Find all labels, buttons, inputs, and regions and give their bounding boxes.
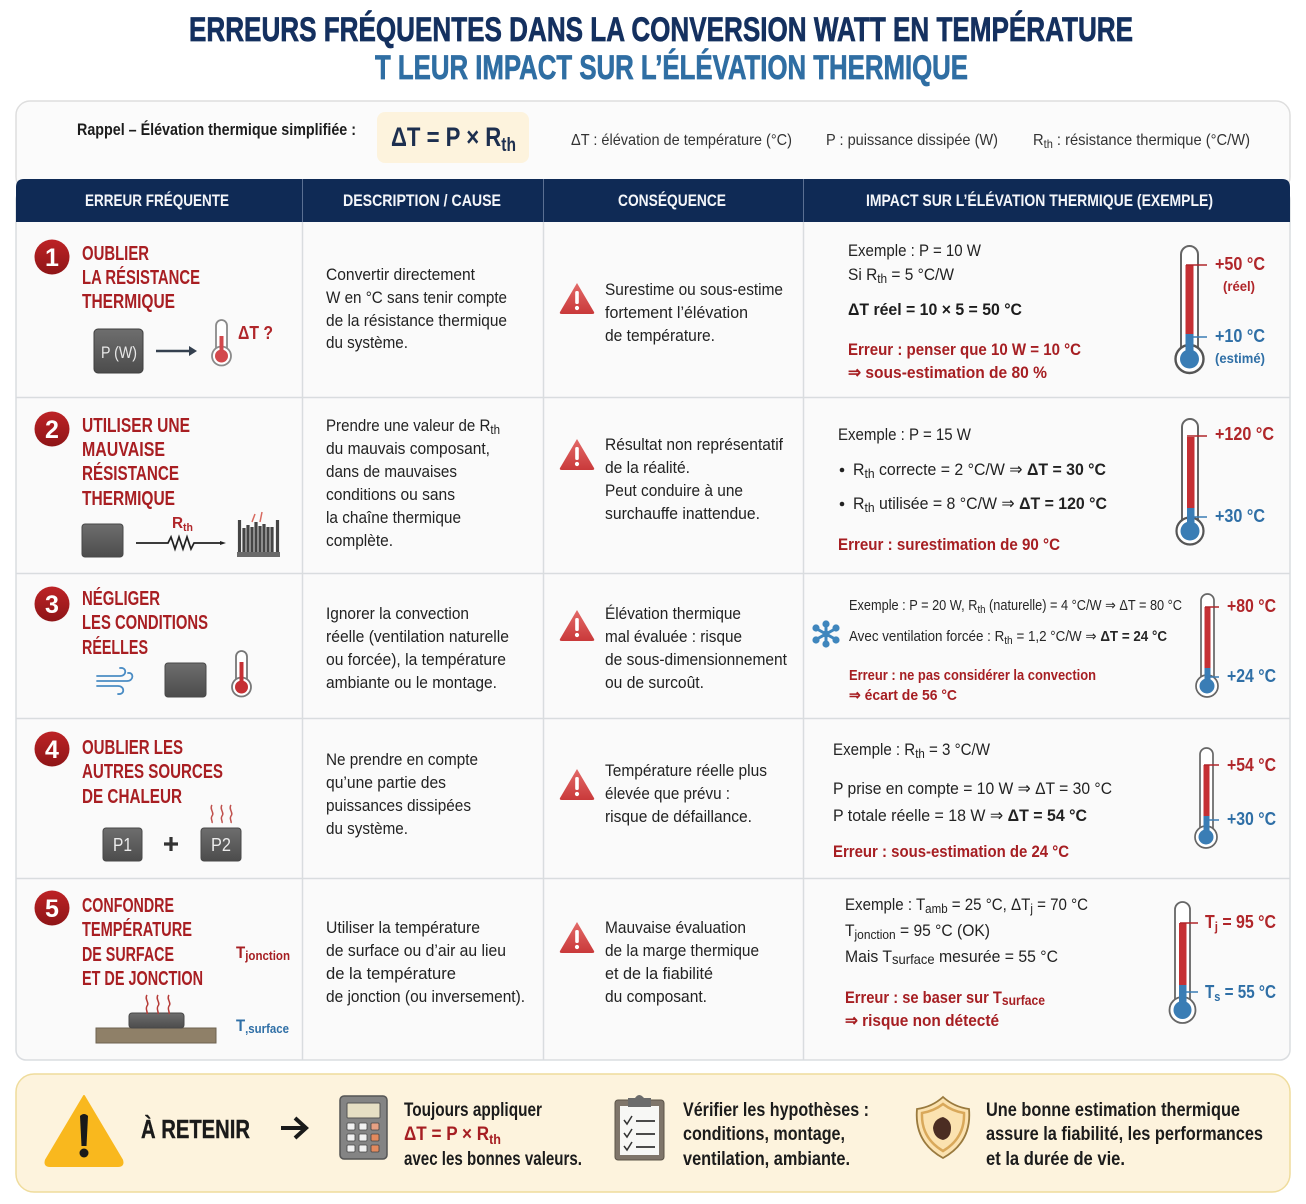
row 2 example: R <box>853 460 865 479</box>
panel: formula reminder: R <box>1033 132 1045 149</box>
row 4 consequence <box>605 761 767 826</box>
thermometer: row 1: +50 °C <box>1215 254 1265 274</box>
row 3 description <box>326 604 509 692</box>
row 2: wrong thermal resistance <box>34 412 1274 557</box>
thermometer: row 1: +10 °C <box>1215 326 1265 346</box>
row 2 description: complète. <box>326 531 393 550</box>
row 5 example: = 70 °C <box>1033 895 1088 914</box>
thermometer: row 1: (estimé) <box>1215 350 1265 366</box>
row 4 description <box>326 750 478 838</box>
icon: warning <box>560 769 594 800</box>
row 4 example: P prise en compte = 10 W ⇒ ΔT = 30 °C <box>833 779 1112 798</box>
panel: formula reminder: Rappel – Élévation thermique simplifiée : <box>77 120 356 139</box>
row 1 consequence: fortement l’élévation <box>605 303 748 322</box>
row 1 example: th <box>877 271 887 286</box>
row 4 example: P totale réelle = 18 W ⇒ ΔT = 54 °C <box>833 806 1087 825</box>
panel: key takeaways <box>16 1074 1290 1192</box>
takeaway 3 text: Une bonne estimation thermique <box>986 1100 1240 1121</box>
row 1 heading <box>82 243 200 313</box>
thermometer: row 2: +120 °C <box>1215 424 1274 444</box>
row 2 example: Erreur : surestimation de 90 °C <box>838 535 1060 554</box>
row 3 example: Avec ventilation forcée : R <box>849 629 1017 645</box>
thermometer: row 3: +80 °C <box>1227 596 1276 616</box>
row 3 description: ou forcée), la température <box>326 650 506 669</box>
row 1 description <box>326 265 507 352</box>
row 4 heading: OUBLIER LES <box>82 737 183 759</box>
row 2 consequence <box>605 435 783 523</box>
row 5 example: Mais T <box>845 947 896 966</box>
row 3 consequence: ou de surcoût. <box>605 673 704 692</box>
table header: DESCRIPTION / CAUSE <box>343 191 501 210</box>
icon: two power sources: P1 <box>113 835 132 855</box>
row 2 example: R <box>853 494 865 513</box>
row 5 consequence: Mauvaise évaluation <box>605 918 746 937</box>
panel: formula reminder: : résistance thermique (°C/W) <box>1053 132 1250 149</box>
table header: CONSÉQUENCE <box>618 191 726 210</box>
row 1 example: Si R <box>848 265 880 284</box>
row 4 example <box>833 740 1112 861</box>
takeaway 1 text: ΔT = P × R <box>404 1124 499 1145</box>
takeaway 1 text: avec les bonnes valeurs. <box>404 1149 582 1170</box>
icon: component, resistor and heatsink: th <box>183 522 193 534</box>
row 2 heading <box>82 415 190 510</box>
row 4: other heat sources <box>34 732 1276 861</box>
thermometer: row 5 <box>1170 902 1276 1023</box>
row 4 heading <box>82 737 223 808</box>
badge 2 <box>34 412 70 446</box>
thermometer: row 5: T <box>1205 982 1216 1002</box>
badge 1 <box>34 240 70 274</box>
row 2 example: correcte = 2 °C/W ⇒ <box>875 460 1027 479</box>
row 5 example: j <box>1029 901 1033 916</box>
badge 4 <box>34 732 70 766</box>
row 5 consequence: du composant. <box>605 987 707 1006</box>
row 3 heading: RÉELLES <box>82 636 148 659</box>
icon: airflow, component, thermometer <box>97 651 251 697</box>
table header: IMPACT SUR L’ÉLÉVATION THERMIQUE (EXEMPLE) <box>866 191 1213 210</box>
row 1 description: de la résistance thermique <box>326 311 507 330</box>
row 4 consequence: Température réelle plus <box>605 761 767 780</box>
thermometer: row 1: (réel) <box>1223 278 1255 294</box>
badge 3: 3 <box>45 591 59 619</box>
row 3 description: ambiante ou le montage. <box>326 673 497 692</box>
row 3 consequence: de sous-dimensionnement <box>605 650 787 669</box>
icon: chip on substrate: jonction <box>244 948 290 963</box>
thermometer: row 3 <box>1196 594 1276 697</box>
takeaway 1 text: Toujours appliquer <box>404 1100 542 1121</box>
row 5 heading: TEMPÉRATURE <box>82 918 192 941</box>
thermometer: row 2 <box>1176 419 1274 544</box>
panel: formula reminder: ΔT : élévation de température (°C) <box>571 132 792 149</box>
row 5 heading: CONFONDRE <box>82 895 174 917</box>
thermometer: row 4: +54 °C <box>1227 755 1276 775</box>
icon: shield <box>917 1097 969 1158</box>
row 3 description: réelle (ventilation naturelle <box>326 627 509 646</box>
row 5 description: de surface ou d’air au lieu <box>326 941 506 960</box>
row 3 example: ⇒ écart de 56 °C <box>849 687 957 704</box>
row 3 heading: NÉGLIGER <box>82 587 160 610</box>
thermometer: row 5: j <box>1214 919 1218 934</box>
row 1 example <box>848 241 1081 382</box>
row 3 example: (naturelle) = 4 °C/W ⇒ ΔT = 80 °C <box>986 598 1182 614</box>
table header <box>16 179 1290 222</box>
row 2 description <box>326 416 500 550</box>
row 5 example: = 25 °C, ΔT <box>948 895 1030 914</box>
row 4 description: Ne prendre en compte <box>326 750 478 769</box>
badge 2: 2 <box>45 416 59 444</box>
icon: two power sources <box>103 805 241 861</box>
row 5 heading: ET DE JONCTION <box>82 968 203 990</box>
takeaway heading: À RETENIR <box>141 1114 250 1144</box>
badge 4: 4 <box>45 736 59 764</box>
row 5 example: Exemple : T <box>845 895 935 914</box>
row 2 description: th <box>490 422 500 437</box>
panel: formula reminder: P : puissance dissipée (W) <box>826 132 998 149</box>
title <box>189 11 1133 87</box>
row 2 consequence: Résultat non représentatif <box>605 435 783 454</box>
title: T LEUR IMPACT SUR L’ÉLÉVATION THERMIQUE <box>375 49 968 87</box>
row 2 example: ΔT = 30 °C <box>1027 460 1106 479</box>
row 4 heading: AUTRES SOURCES <box>82 761 223 783</box>
thermometer: row 4 <box>1195 748 1276 848</box>
row 2 description: la chaîne thermique <box>326 508 461 527</box>
takeaway 3 text <box>986 1100 1263 1170</box>
row 5 example <box>845 895 1088 1030</box>
row 5 description: Utiliser la température <box>326 918 480 937</box>
row 1 heading: THERMIQUE <box>82 291 175 313</box>
icon: warning triangle <box>46 1096 122 1166</box>
row 1 consequence <box>605 280 783 345</box>
row 2 description: du mauvais composant, <box>326 439 490 458</box>
row 5 heading: DE SURFACE <box>82 944 174 966</box>
row 5 consequence: de la marge thermique <box>605 941 759 960</box>
row 1 heading: OUBLIER <box>82 243 149 265</box>
icon: power to temperature: ΔT ? <box>238 323 273 343</box>
row 1 example: ⇒ sous-estimation de 80 % <box>848 363 1047 382</box>
row 3 example: th <box>1004 635 1013 647</box>
icon: warning <box>560 439 594 470</box>
row 3 heading: LES CONDITIONS <box>82 612 208 634</box>
thermometer: row 5: = 95 °C <box>1218 912 1276 932</box>
takeaway 1 text <box>404 1100 582 1170</box>
takeaway 2 text <box>683 1100 869 1170</box>
row 1 description: du système. <box>326 333 408 352</box>
panel: formula reminder: th <box>1044 137 1053 151</box>
row 3: neglecting real conditions <box>34 586 1276 704</box>
table header: ERREUR FRÉQUENTE <box>85 191 229 210</box>
panel: table background <box>16 190 1290 1060</box>
row 3 description: Ignorer la convection <box>326 604 469 623</box>
row 5 description: de jonction (ou inversement). <box>326 987 525 1006</box>
row 4 description: puissances dissipées <box>326 796 471 815</box>
row 1 example: Erreur : penser que 10 W = 10 °C <box>848 340 1081 359</box>
row 2 description: conditions ou sans <box>326 485 455 504</box>
row 2 description: Prendre une valeur de R <box>326 416 511 435</box>
row 1 heading: LA RÉSISTANCE <box>82 266 200 289</box>
row 5 consequence: et de la fiabilité <box>605 964 713 983</box>
badge 1: 1 <box>45 244 59 272</box>
row 3 consequence <box>605 604 787 692</box>
icon: fan <box>812 620 840 648</box>
row 5 consequence <box>605 918 759 1006</box>
icon: power to temperature <box>94 320 273 373</box>
row 5 example: Erreur : se baser sur T <box>845 988 1026 1007</box>
row 4 example: Exemple : R <box>833 740 926 759</box>
icon: calculator <box>340 1096 387 1159</box>
row 5 example: surface <box>892 951 935 967</box>
row 2 example: th <box>864 500 875 515</box>
row 3 example: th <box>977 604 986 616</box>
row 2 example: utilisée = 8 °C/W ⇒ <box>875 494 1019 513</box>
row 5 example: surface <box>1002 992 1045 1008</box>
icon: chip on substrate: T <box>236 943 246 962</box>
row 3 example: Exemple : P = 20 W, R <box>849 598 995 614</box>
row 3 consequence: Élévation thermique <box>605 604 741 623</box>
row 5 description <box>326 918 525 1006</box>
row 3 example: ΔT = 24 °C <box>1100 629 1167 645</box>
row 3 example: Erreur : ne pas considérer la convection <box>849 667 1096 684</box>
row 4 description: du système. <box>326 819 408 838</box>
takeaway 2 text: conditions, montage, <box>683 1124 845 1145</box>
thermometer: row 2: +30 °C <box>1215 506 1265 526</box>
icon: two power sources: P2 <box>211 835 231 855</box>
icon: chip on substrate: T <box>236 1016 246 1035</box>
row 1 description: W en °C sans tenir compte <box>326 288 507 307</box>
row 2 consequence: Peut conduire à une <box>605 481 743 500</box>
row 2 heading: THERMIQUE <box>82 488 175 510</box>
row 2 example <box>838 425 1107 554</box>
icon: warning <box>560 610 594 641</box>
icon: component, resistor and heatsink <box>82 512 280 557</box>
row 1 example: = 5 °C/W <box>887 265 954 284</box>
thermometer: row 3: +24 °C <box>1227 666 1276 686</box>
takeaway 3 text: et la durée de vie. <box>986 1149 1125 1170</box>
row 5 example: ⇒ risque non détecté <box>845 1011 999 1030</box>
panel: formula reminder: th <box>501 135 516 156</box>
row 1 example: ΔT réel = 10 × 5 = 50 °C <box>848 300 1022 319</box>
icon: warning <box>560 283 594 314</box>
thermometer: row 1 <box>1176 246 1265 373</box>
row 2 heading: RÉSISTANCE <box>82 462 179 485</box>
icon: chip on substrate: ,surface <box>245 1021 289 1036</box>
row 1 consequence: Surestime ou sous-estime <box>605 280 783 299</box>
row 3 example: = 1,2 °C/W ⇒ <box>1013 629 1100 645</box>
row 2 description: dans de mauvaises <box>326 462 457 481</box>
thermometer: row 5: T <box>1205 912 1216 932</box>
row 2 heading: MAUVAISE <box>82 439 165 461</box>
takeaway 2 text: Vérifier les hypothèses : <box>683 1100 869 1121</box>
row 3 consequence: mal évaluée : risque <box>605 627 742 646</box>
row 1: forgetting thermal resistance <box>34 240 1265 382</box>
row 5: surface versus junction temperature <box>34 890 1276 1043</box>
row 4 heading: DE CHALEUR <box>82 786 182 808</box>
row 2 consequence: surchauffe inattendue. <box>605 504 760 523</box>
row 2 consequence: de la réalité. <box>605 458 690 477</box>
row 4 description: qu’une partie des <box>326 773 446 792</box>
arrow <box>281 1118 306 1138</box>
panel: formula reminder <box>16 101 1290 191</box>
takeaway 2 text: ventilation, ambiante. <box>683 1149 850 1170</box>
row 5 description: de la température <box>326 964 456 983</box>
row 5 heading <box>82 895 203 990</box>
icon: component, resistor and heatsink: R <box>172 515 184 532</box>
thermometer: row 5: s <box>1214 989 1220 1004</box>
row 2 example: Exemple : P = 15 W <box>838 425 971 444</box>
row 4 example: th <box>915 746 925 761</box>
badge 5: 5 <box>45 895 59 923</box>
row 5 example: mesurée = 55 °C <box>935 947 1058 966</box>
badge 5 <box>34 890 70 926</box>
takeaway 3 text: assure la fiabilité, les performances <box>986 1124 1263 1145</box>
badge 3 <box>34 586 70 622</box>
row 2 example: th <box>864 466 875 481</box>
row 3 example <box>849 598 1182 704</box>
panel: formula reminder: ΔT = P × R <box>391 122 525 152</box>
row 4 example: Erreur : sous-estimation de 24 °C <box>833 842 1069 861</box>
row 2 heading: UTILISER UNE <box>82 415 190 437</box>
icon: chip on substrate <box>96 943 290 1043</box>
thermometer: row 4: +30 °C <box>1227 809 1276 829</box>
row 5 example: = 95 °C (OK) <box>896 921 990 940</box>
row 5 example: T <box>845 921 855 940</box>
thermometer: row 5: = 55 °C <box>1220 982 1276 1002</box>
takeaway 1 text: th <box>489 1131 501 1147</box>
row 1 description: Convertir directement <box>326 265 475 284</box>
icon: warning <box>560 922 594 953</box>
row 4 consequence: élevée que prévu : <box>605 784 730 803</box>
row 2 example: ΔT = 120 °C <box>1019 494 1107 513</box>
row 5 example: jonction <box>854 927 896 942</box>
icon: power to temperature: P (W) <box>101 343 137 362</box>
row 1 example: Exemple : P = 10 W <box>848 241 981 260</box>
row 3 heading <box>82 587 208 659</box>
row 4 example: = 3 °C/W <box>925 740 990 759</box>
row 1 consequence: de température. <box>605 326 715 345</box>
row 4 consequence: risque de défaillance. <box>605 807 752 826</box>
icon: clipboard checklist <box>615 1095 664 1160</box>
row 5 example: amb <box>925 901 948 916</box>
